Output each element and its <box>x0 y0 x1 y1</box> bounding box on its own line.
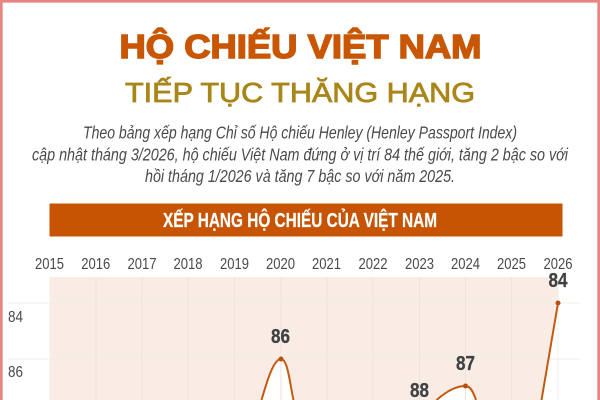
year axis labels: 2026 <box>544 256 573 273</box>
year axis labels: 2019 <box>220 256 249 273</box>
year axis labels <box>35 256 573 273</box>
data labels: 87 <box>456 352 475 375</box>
data labels: 86 <box>271 325 290 348</box>
year axis labels: 2022 <box>358 256 388 273</box>
year axis labels: 2021 <box>312 256 341 273</box>
year axis labels: 2024 <box>451 256 480 273</box>
year axis labels: 2015 <box>35 256 64 273</box>
year axis labels: 2018 <box>174 256 203 273</box>
data labels: 84 <box>548 269 568 292</box>
data line <box>262 303 558 400</box>
intro text <box>32 122 569 186</box>
intro text: hồi tháng 1/2026 và tăng 7 bậc so với năm 2025. <box>145 166 455 186</box>
year axis labels: 2023 <box>405 256 434 273</box>
data points <box>278 300 560 388</box>
rank axis labels <box>8 309 23 381</box>
title: HỘ CHIẾU VIỆT NAM <box>120 27 481 65</box>
plot background <box>50 277 558 400</box>
section heading bar: XẾP HẠNG HỘ CHIẾU CỦA VIỆT NAM <box>163 208 437 232</box>
rank axis labels: 86 <box>8 364 23 381</box>
rank axis labels: 84 <box>8 309 23 326</box>
year axis labels: 2020 <box>266 256 295 273</box>
data labels <box>271 269 568 400</box>
subtitle: TIẾP TỤC THĂNG HẠNG <box>125 77 475 108</box>
year axis labels: 2016 <box>81 256 110 273</box>
year axis labels: 2025 <box>497 256 526 273</box>
line chart <box>8 256 581 400</box>
white area under curve <box>262 303 558 400</box>
year axis labels: 2017 <box>128 256 157 273</box>
section heading bar <box>50 204 562 236</box>
